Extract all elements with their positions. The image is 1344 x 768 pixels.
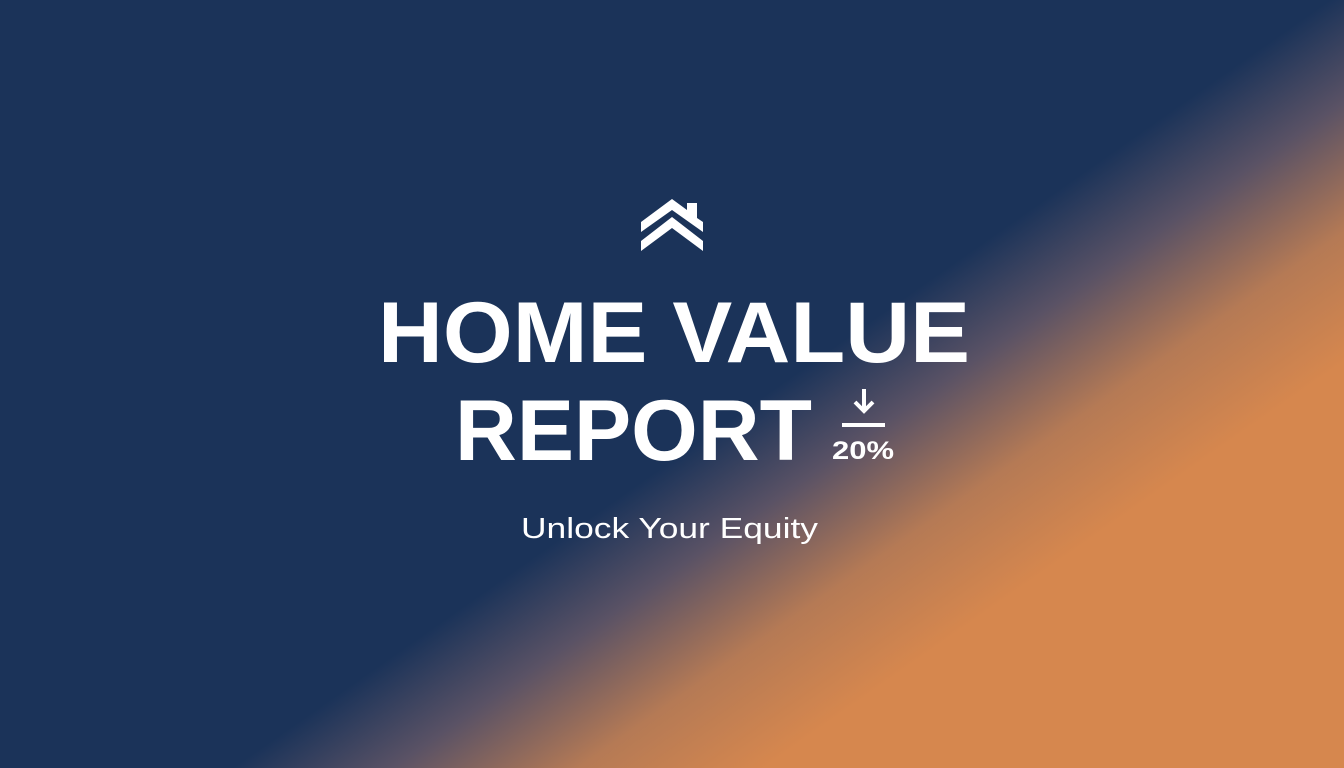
title [378, 285, 970, 479]
title: REPORT [455, 383, 812, 479]
subtitle: Unlock Your Equity [521, 513, 819, 545]
badge: 20% down: 20% [832, 437, 894, 465]
title: HOME VALUE [378, 285, 970, 381]
icon: house chevrons [641, 199, 703, 251]
badge: 20% down [832, 389, 894, 465]
